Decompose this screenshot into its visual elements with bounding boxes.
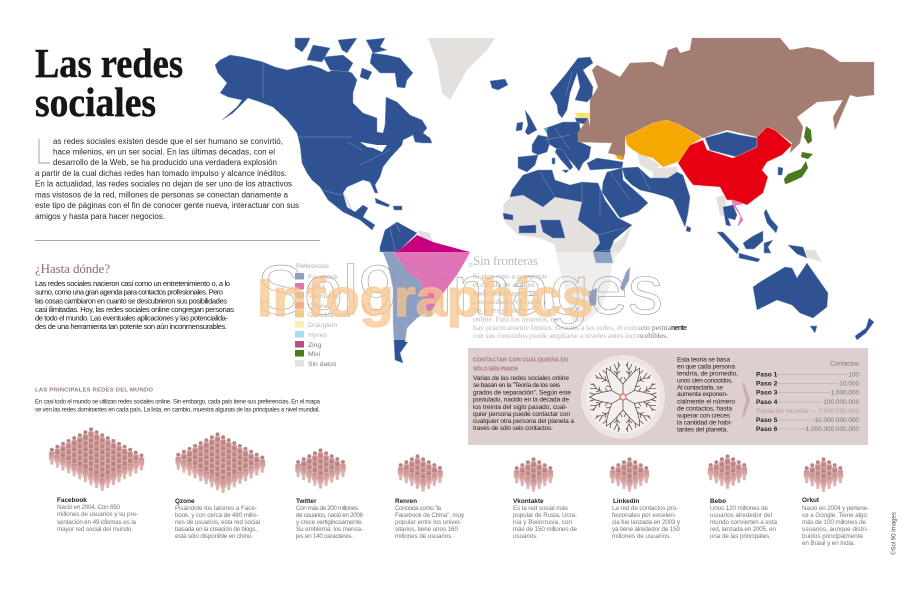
section: Sin fronteras (470, 253, 672, 340)
arrow (743, 383, 749, 417)
text: de usuarios, nació en 2006 (296, 512, 363, 519)
text: más de 150 millones de (513, 526, 577, 533)
region: Draugiem yellow (575, 113, 590, 118)
text: jes en 140 caracteres. (295, 533, 353, 540)
region: grey no-data areas (417, 38, 822, 322)
text (175, 498, 260, 540)
text: theory: grados de separación". Según este (473, 390, 571, 396)
text: Linkedin (613, 498, 639, 505)
text: explanation: tantes del planeta. (677, 426, 728, 434)
text: theory: través de sólo seis contactos. (473, 425, 553, 432)
section: main networks intro: LAS PRINCIPALES REDES DEL MUNDO (35, 388, 153, 394)
intro text: as redes sociales existen desde que el ser humano se convirtió, (53, 137, 283, 146)
table: contacts per step: Paso 6 (756, 426, 778, 433)
text: ce a Google. Tiene algo (802, 512, 867, 519)
text: mundo convierten a esta (710, 519, 777, 526)
legend: Draugiem (308, 322, 338, 329)
text: Bebo (710, 498, 726, 505)
section: Hasta donde (35, 261, 234, 331)
heading: SÓLO SEIS PASOS (473, 364, 518, 372)
text: popular entre los univer- (395, 519, 462, 526)
paragraph (35, 279, 234, 331)
paragraph: des de una herramienta tan potente son aún inconmensurables. (35, 322, 227, 331)
text: Unos 120 millones de (710, 505, 768, 512)
table: contacts per step: Paso 5 (756, 417, 778, 424)
paragraph: comunidades virtuales y (473, 297, 547, 306)
card: Orkut (802, 457, 869, 547)
card: Bebo (708, 454, 777, 540)
text: Facebook (57, 497, 87, 504)
legend: Sin datos (308, 361, 337, 368)
region: Vkontakte Russia (578, 38, 874, 160)
region: Uruguay (425, 308, 433, 317)
text: explanation: unos cien conocidos. (677, 378, 733, 384)
table: contacts per step: 100.000.000 (823, 399, 859, 406)
text: fesionales por excelen- (612, 512, 676, 519)
paragraph: tradicional fueron las (473, 288, 538, 298)
text: usuarios alrededor del (710, 512, 772, 519)
icon: people crowd (610, 457, 649, 492)
text: usuarios. (513, 533, 538, 540)
legend: Facebook (308, 274, 338, 281)
legend: Referencias (296, 263, 330, 270)
title: Las redes (35, 40, 183, 86)
text (395, 498, 465, 540)
icon: people crowd (49, 427, 144, 491)
text (710, 498, 777, 540)
text: nes de usuarios, esta red social (175, 519, 260, 526)
text: La red de contactos pro- (612, 505, 678, 512)
title (35, 40, 183, 125)
text: Nació en 2004. Con 650 (57, 504, 120, 511)
heading (473, 358, 568, 372)
text: buidos principalmente (802, 533, 863, 540)
text: y crece vertiginosamente. (296, 519, 363, 526)
paragraph: Si algo vino a completar (473, 272, 548, 280)
diagram: network tree (581, 355, 665, 439)
text: book, y con cerca de 480 millo- (175, 512, 258, 519)
table: contacts per step: 10.000 (839, 380, 859, 388)
text: Qzone (175, 498, 195, 505)
text: millones de usuarios. (612, 533, 671, 540)
text: theory: se basan en la "Teoría de los seis (473, 382, 561, 389)
text: theory: quier persona puede contactar con (473, 411, 570, 418)
text (513, 498, 577, 540)
paragraph: hay prácticamente límites. Gracias a las redes, el contacto perma (473, 323, 672, 332)
intro text: En la actualidad, las redes sociales no dejan de ser uno de los atractivos (35, 180, 292, 188)
heading: Sin fronteras (473, 253, 538, 268)
watermark: Infographics: Infographics (257, 269, 593, 328)
table: contacts per step: 1.000.000.000.000 (806, 426, 859, 433)
legend: Hyves (308, 332, 327, 339)
fade band (258, 252, 640, 340)
card: Facebook (49, 427, 144, 533)
text: cia fue lanzada en 2003 y (612, 519, 681, 526)
text (295, 498, 363, 540)
region: China red (678, 127, 792, 205)
card: Vkontakte (513, 457, 577, 540)
text: en Brasil y en India. (802, 540, 855, 547)
table: contacts per step: Paso 3 (756, 390, 778, 396)
paragraph: Las redes sociales nacieron casi como un entretenimiento o, a lo (35, 279, 230, 288)
text: Conocida como "la (395, 505, 441, 512)
paragraph: de todo el mundo. Las eventuales aplicaciones y las potencialida- (35, 314, 228, 322)
panel: six steps (468, 348, 868, 445)
legend: Odnoklassniki (308, 312, 351, 319)
text: explanation: en que cada persona (677, 364, 735, 370)
text: explanation: tendría, de promedio, (677, 370, 738, 378)
text: Su emblema: los mensa- (296, 526, 363, 533)
drop cap (39, 139, 50, 163)
text: millones de usuarios y su pre- (57, 511, 138, 518)
intro text: a partir de la cual dichas redes han tomado impulso y alcance inéditos. (35, 169, 287, 178)
icon: people crowd (398, 454, 443, 492)
table: contacts per step: 7.000.000.000 (818, 408, 859, 415)
text: theory: los treinta del siglo pasado, cual- (473, 404, 567, 411)
paragraph: sumo, como una gran agenda para contactos profesionales. Pero (35, 288, 223, 296)
card: Qzone (175, 432, 265, 540)
icon: people crowd (804, 457, 843, 492)
table: contacts per step: 10.000.000.000 (815, 417, 859, 424)
world map (215, 38, 874, 363)
text: sentación en 49 idiomas es la (57, 519, 136, 526)
text: Renren (395, 498, 417, 505)
paragraph: casi ilimitadas. Hoy, las redes sociales online congregan personas (35, 305, 234, 314)
text: red, lanzada en 2005, en (710, 526, 776, 533)
icon: people crowd (295, 448, 346, 489)
legend: Orkut (308, 284, 325, 291)
text (612, 498, 681, 540)
text (802, 497, 869, 547)
region: Kazakhstan orange (625, 120, 702, 167)
icon: people crowd (514, 457, 553, 492)
text: popular de Rusia, Ucra- (513, 512, 577, 519)
paragraph: con sus conocidos puede ampliarse a niveles antes inconcebibles. (473, 331, 668, 340)
paragraph (473, 272, 672, 340)
text: explanation: Al contactarla, se (677, 384, 723, 392)
text: explanation: aumenta exponen- (677, 391, 728, 398)
intro text: hace milenios, en un ser social. En las últimas décadas, con el (53, 148, 275, 156)
text: explanation: la cantidad de habi- (677, 420, 732, 426)
text: Pisándole los talones a Face- (175, 505, 257, 512)
text: más de 100 millones de (802, 519, 866, 526)
table: contacts per step: 1.000.000 (831, 390, 859, 396)
text: Con más de 200 millones (296, 505, 358, 512)
text: basada en la creación de blogs, (175, 526, 257, 533)
paragraph: el círculo de amigos (473, 280, 534, 289)
text: explanation: Esta teoría se basa (677, 356, 730, 364)
legend (295, 263, 351, 368)
intro text: este tipo de páginas con el fin de conocer gente nueva, interactuar con sus (35, 201, 299, 210)
credit: ©Sol 90 Images (890, 512, 898, 555)
watermark: Sol90images: Sol90images (257, 251, 663, 329)
text: theory: postulado, nacido en la década de (473, 396, 569, 404)
table: contacts per step: 100 (848, 372, 859, 378)
text: end of highlighted word: nente (671, 325, 687, 332)
region: Japan green (784, 126, 813, 184)
text: millones de usuarios. (395, 533, 453, 540)
text: explanation: de contactos, hasta (677, 406, 732, 412)
text: theory: cualquier otra persona del planeta a (473, 418, 574, 425)
table: contacts per step (756, 360, 859, 433)
text: Facebook de China", muy (395, 512, 465, 519)
landmark: great lakes (360, 142, 387, 152)
intro text: mas vistosos de la red, millones de personas se conectan dariamente a (35, 190, 289, 200)
text: theory: Varias de las redes sociales online (473, 375, 569, 382)
text: Vkontakte (513, 498, 544, 505)
heading: CONTACTAR CON CUALQUIERA EN (473, 358, 568, 364)
legend: Zing (308, 342, 321, 349)
table: contacts per step: Paso 1 (756, 372, 778, 378)
intro text: desarrollo de la Web, se ha producido una verdadera explosión (53, 158, 277, 167)
text (57, 497, 138, 533)
legend: Mixi (308, 351, 321, 358)
text: una de las principales. (710, 533, 771, 540)
card: Twitter (295, 448, 363, 540)
text: Nació en 2004 y pertene- (802, 505, 869, 512)
title: sociales (35, 79, 156, 125)
table: contacts per step: Población mundial (756, 408, 808, 415)
text: mayor red social del mundo. (57, 526, 133, 533)
intro text: amigos y hasta para hacer negocios. (35, 212, 165, 221)
card: Linkedin (610, 457, 681, 540)
legend: QZone (308, 303, 329, 310)
text: explanation: cialmente el número (677, 398, 735, 406)
section: main networks intro: se ven las redes dominantes en cada país. La lista, en cambio, muestra algunas de las principales a nivel mundial. (35, 406, 320, 414)
region: Facebook countries (215, 38, 874, 363)
table: contacts per step: Contactos (830, 360, 859, 368)
paragraph: las redes sociales (473, 306, 525, 314)
section: main networks intro: En casi todo el mundo se utilizan redes sociales online. Sin embargo, cada país tiene sus preferencias. En el mapa (35, 398, 321, 406)
text: explanation (677, 356, 738, 434)
region: Orkut Brazil (393, 235, 470, 312)
text: Es la red social más (513, 505, 568, 512)
text: theory (473, 375, 574, 432)
text: usuarios, aunque distri- (802, 526, 868, 533)
text: explanation: superar con creces (677, 412, 731, 420)
text: Orkut (802, 497, 820, 504)
paragraph: online. Para los usuarios, no (473, 314, 558, 324)
section: main networks intro (35, 388, 321, 414)
heading: ¿Hasta dónde? (35, 261, 110, 276)
text: ya tiene alrededor de 150 (612, 526, 680, 533)
card: Renren (395, 454, 465, 540)
paragraph: las cosas cambiaron en cuanto se descubrieron sus posibilidades (35, 296, 227, 306)
text: Twitter (296, 498, 317, 505)
icon: people crowd (708, 454, 747, 489)
text: nia y Bielorrusia, con (513, 519, 572, 526)
text: está sólo disponible en chino. (175, 533, 253, 540)
intro text (35, 137, 299, 221)
legend: Vkontakte (308, 293, 338, 300)
icon: people crowd (175, 432, 265, 493)
table: contacts per step: Paso 2 (756, 380, 778, 388)
table: contacts per step: Paso 4 (756, 399, 778, 406)
text: sitarios, tiene unos 160 (395, 526, 458, 533)
